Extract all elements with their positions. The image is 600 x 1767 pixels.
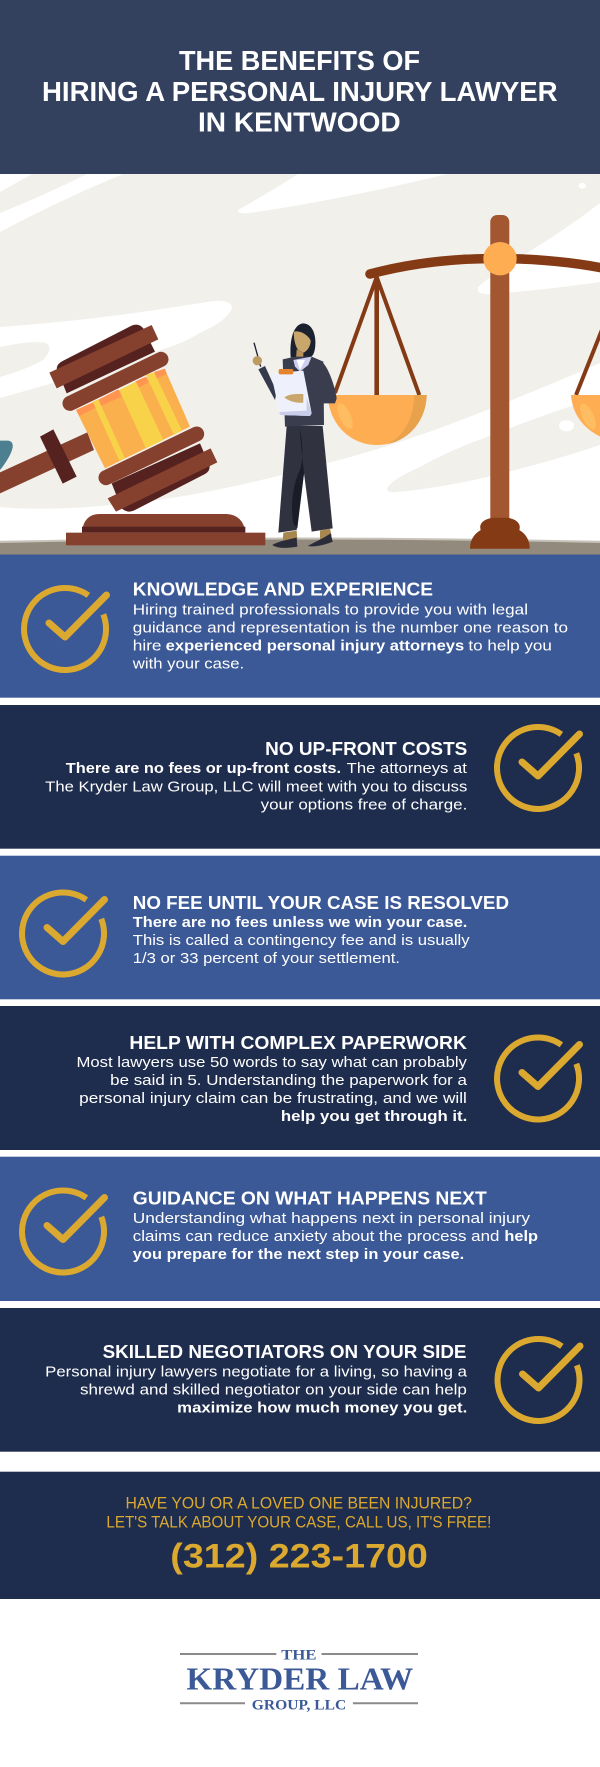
title [42,45,558,138]
panel: guidance on what happens next [0,1157,600,1301]
phone number: (312) 223-1700 [170,1537,428,1575]
body text: 1/3 or 33 percent of your settlement. [133,950,400,967]
title: IN KENTWOOD [198,107,401,138]
illustration: lawyer with gavel and scales [0,174,600,555]
panel: knowledge and experience [0,554,600,698]
title: THE BENEFITS OF [179,45,420,76]
logo: The Kryder Law Group, LLC: KRYDER LAW [186,1660,413,1696]
body text: to help you [468,637,552,654]
body text: help you get through it. [281,1108,467,1125]
icon: scales of justice [328,215,600,549]
body text: The attorneys at [347,760,468,777]
body text [133,1210,538,1263]
body text: be said in 5. Understanding the paperwork for a [110,1072,468,1089]
body text: claims can reduce anxiety about the process and [133,1228,499,1245]
panel: skilled negotiators [0,1308,600,1452]
header banner [0,0,600,174]
heading: SKILLED NEGOTIATORS ON YOUR SIDE [103,1342,466,1362]
panel: no up-front costs [0,705,600,849]
panel: help with complex paperwork [0,1006,600,1150]
heading: HELP WITH COMPLEX PAPERWORK [129,1033,467,1053]
icon: woman lawyer holding clipboard [253,323,337,548]
logo: The Kryder Law Group, LLC: THE [281,1647,316,1663]
body text: help [504,1228,538,1245]
body text: The Kryder Law Group, LLC will meet with you to discuss [45,778,467,795]
body text: Personal injury lawyers negotiate for a living, so having a [45,1363,468,1380]
body text [76,1054,468,1125]
heading: NO UP-FRONT COSTS [265,739,467,759]
body text: your options free of charge. [261,796,467,813]
body text: with your case. [132,655,244,672]
body text: guidance and representation is the number one reason to [133,619,568,636]
body text: shrewd and skilled negotiator on your side can help [80,1381,467,1398]
heading: NO FEE UNTIL YOUR CASE IS RESOLVED [133,893,509,913]
icon: gold check mark [497,727,580,809]
body text: There are no fees or up-front costs. [66,760,341,777]
body text: There are no fees unless we win your case. [133,914,467,931]
body text [45,1363,468,1416]
call to action text [106,1494,491,1531]
icon: gold check mark [498,1339,580,1421]
icon: gold check mark [22,1190,104,1272]
icon: gold check mark [497,1037,580,1119]
logo: The Kryder Law Group, LLC: GROUP, LLC [252,1697,346,1713]
body text: you prepare for the next step in your case. [133,1246,464,1263]
heading: KNOWLEDGE AND EXPERIENCE [133,580,433,600]
call to action text: LET'S TALK ABOUT YOUR CASE, CALL US, IT'S FREE! [106,1513,491,1531]
body text: Understanding what happens next in personal injury [133,1210,531,1227]
body text: Hiring trained professionals to provide you with legal [133,601,528,618]
heading: GUIDANCE ON WHAT HAPPENS NEXT [133,1189,487,1209]
icon: gold check mark [22,892,104,974]
body text: hire [133,637,162,654]
body text [132,601,568,672]
body text: Most lawyers use 50 words to say what can probably [76,1054,467,1071]
panel: no fee until resolved [0,856,600,999]
ground [0,538,600,555]
logo: The Kryder Law Group, LLC [180,1647,418,1713]
body text [133,914,470,967]
body text: personal injury claim can be frustrating, and we will [79,1090,467,1107]
call to action text: HAVE YOU OR A LOVED ONE BEEN INJURED? [126,1494,472,1512]
body text [45,760,468,813]
body text: experienced personal injury attorneys [166,637,464,654]
panel: call to action [0,1472,600,1599]
body text: This is called a contingency fee and is usually [133,932,470,949]
icon: gavel [0,325,265,545]
body text: maximize how much money you get. [177,1399,467,1416]
icon: gold check mark [24,588,106,670]
title: HIRING A PERSONAL INJURY LAWYER [42,76,558,107]
